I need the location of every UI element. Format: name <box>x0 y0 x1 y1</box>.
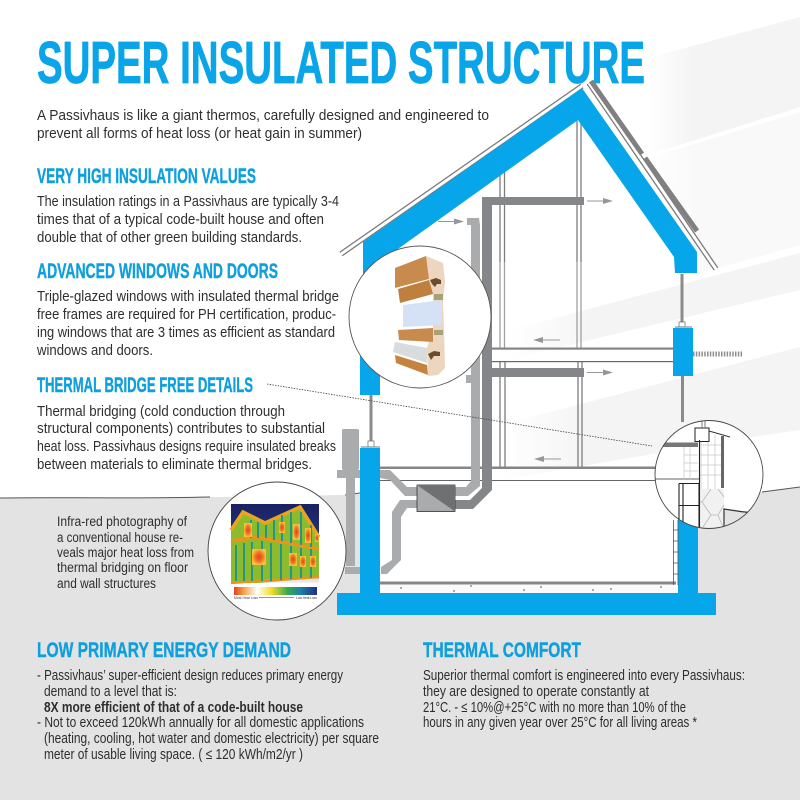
insulation grid <box>684 435 722 489</box>
wall plate <box>695 428 709 442</box>
section: advanced windows and doors: Triple-glazed windows with insulated thermal bridge <box>37 289 339 305</box>
section: thermal bridge free details: between materials to eliminate thermal bridges. <box>37 457 312 473</box>
section: very high insulation values: VERY HIGH INSULATION VALUES <box>37 165 256 188</box>
blue wall in circle <box>678 520 698 540</box>
scale caption: Most Heat Loss <box>234 596 258 600</box>
thermal photo house <box>231 507 319 583</box>
basement interior <box>380 480 678 593</box>
basement floor <box>380 582 676 593</box>
intro text: A Passivhaus is like a giant thermos, carefully designed and engineered to <box>37 108 489 124</box>
dark extract duct <box>455 197 584 509</box>
section: thermal bridge free details: Thermal bridging (cold conduction through <box>37 404 285 420</box>
insulated roof <box>363 88 697 274</box>
circle inset: thermal image <box>208 482 346 620</box>
infra-red caption: Infra-red photography of <box>57 514 187 529</box>
intro text: prevent all forms of heat loss (or heat gain in summer) <box>37 126 362 142</box>
section: very high insulation values: times that of a typical code-built house and often <box>37 212 324 228</box>
section: low primary energy demand: - Passivhaus’ super-efficient design reduces primary energy <box>37 668 344 684</box>
upper floor <box>491 348 673 362</box>
upper left insulated wall <box>360 340 380 395</box>
soil outside <box>723 508 748 526</box>
lower left insulated wall <box>360 448 380 598</box>
bottom timber <box>395 355 428 375</box>
section: very high insulation values: double that of other green building standards. <box>37 230 302 246</box>
section: low primary energy demand <box>37 639 379 763</box>
section: low primary energy demand: - Not to exceed 120kWh annually for all domestic applications <box>37 715 364 731</box>
upper right insulated wall <box>673 328 693 376</box>
wall plate details <box>361 322 692 447</box>
ground tie <box>693 352 743 356</box>
section: advanced windows and doors: ADVANCED WINDOWS AND DOORS <box>37 260 278 283</box>
thin wall sections <box>370 274 684 445</box>
section: thermal comfort: 21°C. - ≤ 10%@+25°C with no more than 10% of the <box>423 700 686 716</box>
solar panels <box>591 81 697 231</box>
section: thermal bridge free details: heat loss. Passivhaus designs require insulated breaks <box>37 439 336 455</box>
ground edge line <box>0 487 800 498</box>
infra-red caption: and wall structures <box>57 576 156 591</box>
lower floor <box>380 466 655 481</box>
temperature scale <box>234 587 317 595</box>
rigid foam foundation <box>700 489 724 529</box>
section: low primary energy demand: meter of usable living space. ( ≤ 120 kWh/m2/yr ) <box>44 747 303 763</box>
lower right insulated wall <box>678 515 698 600</box>
circle inset: thermal bridge detail <box>654 420 764 529</box>
insulated cladding <box>393 342 427 363</box>
basement wall <box>679 440 700 529</box>
section: low primary energy demand: (heating, cooling, hot water and domestic electricity) per square <box>44 731 379 747</box>
section: thermal comfort: THERMAL COMFORT <box>423 639 581 662</box>
section: thermal bridge free details: THERMAL BRIDGE FREE DETAILS <box>37 374 253 397</box>
light supply duct <box>455 218 480 496</box>
section: thermal comfort: they are designed to operate constantly at <box>423 684 649 700</box>
outdoor vertical duct <box>337 429 361 574</box>
floor slab edge <box>660 442 698 447</box>
section: advanced windows and doors: windows and doors. <box>36 343 153 359</box>
section: thermal bridge free details: structural components) contributes to substantial <box>37 421 325 437</box>
heat recovery exchanger <box>417 485 455 512</box>
house cross-section diagram <box>337 81 743 615</box>
section: thermal comfort: hours in any given year over 25°C for all living areas * <box>423 715 697 731</box>
section: very high insulation values <box>37 165 339 246</box>
section: advanced windows and doors <box>36 260 339 359</box>
hot spots <box>244 523 252 537</box>
intro text <box>37 108 489 142</box>
infra-red caption: veals major heat loss from <box>57 545 194 560</box>
section: advanced windows and doors: free frames are required for PH certification, produc- <box>37 307 336 323</box>
circle inset: window section <box>349 246 491 388</box>
section: very high insulation values: The insulation ratings in a Passivhaus are typically 3-4 <box>37 194 339 210</box>
section: low primary energy demand: 8X more efficient of that of a code-built house <box>44 700 303 716</box>
window frame timber <box>426 256 445 376</box>
window and wall frames <box>500 120 582 467</box>
section: thermal comfort <box>423 639 745 731</box>
scale caption <box>234 596 317 600</box>
section: thermal bridge free details <box>37 374 336 473</box>
section: low primary energy demand: LOW PRIMARY ENERGY DEMAND <box>37 639 291 662</box>
dotted leader line <box>267 384 652 446</box>
insulated foundation slab <box>337 593 716 615</box>
basement brick wall <box>673 520 678 585</box>
top sash timber <box>395 256 429 288</box>
infra-red caption: thermal bridging on floor <box>57 560 188 575</box>
section: advanced windows and doors: ing windows that are 3 times as efficient as standard <box>37 325 335 341</box>
ground <box>0 487 800 800</box>
thermal photo sky <box>231 504 319 583</box>
infra-red caption: a conventional house re- <box>57 530 183 545</box>
lower sash timber <box>398 328 433 342</box>
scale caption: Low Heat Loss <box>296 596 317 600</box>
section: low primary energy demand: demand to a level that is: <box>44 684 177 700</box>
triple glazing <box>403 300 442 327</box>
airflow arrows <box>438 198 613 462</box>
roof sheathing <box>341 83 716 269</box>
infra-red caption <box>57 514 194 591</box>
second sash timber <box>398 280 433 303</box>
intake ducts <box>380 470 417 574</box>
